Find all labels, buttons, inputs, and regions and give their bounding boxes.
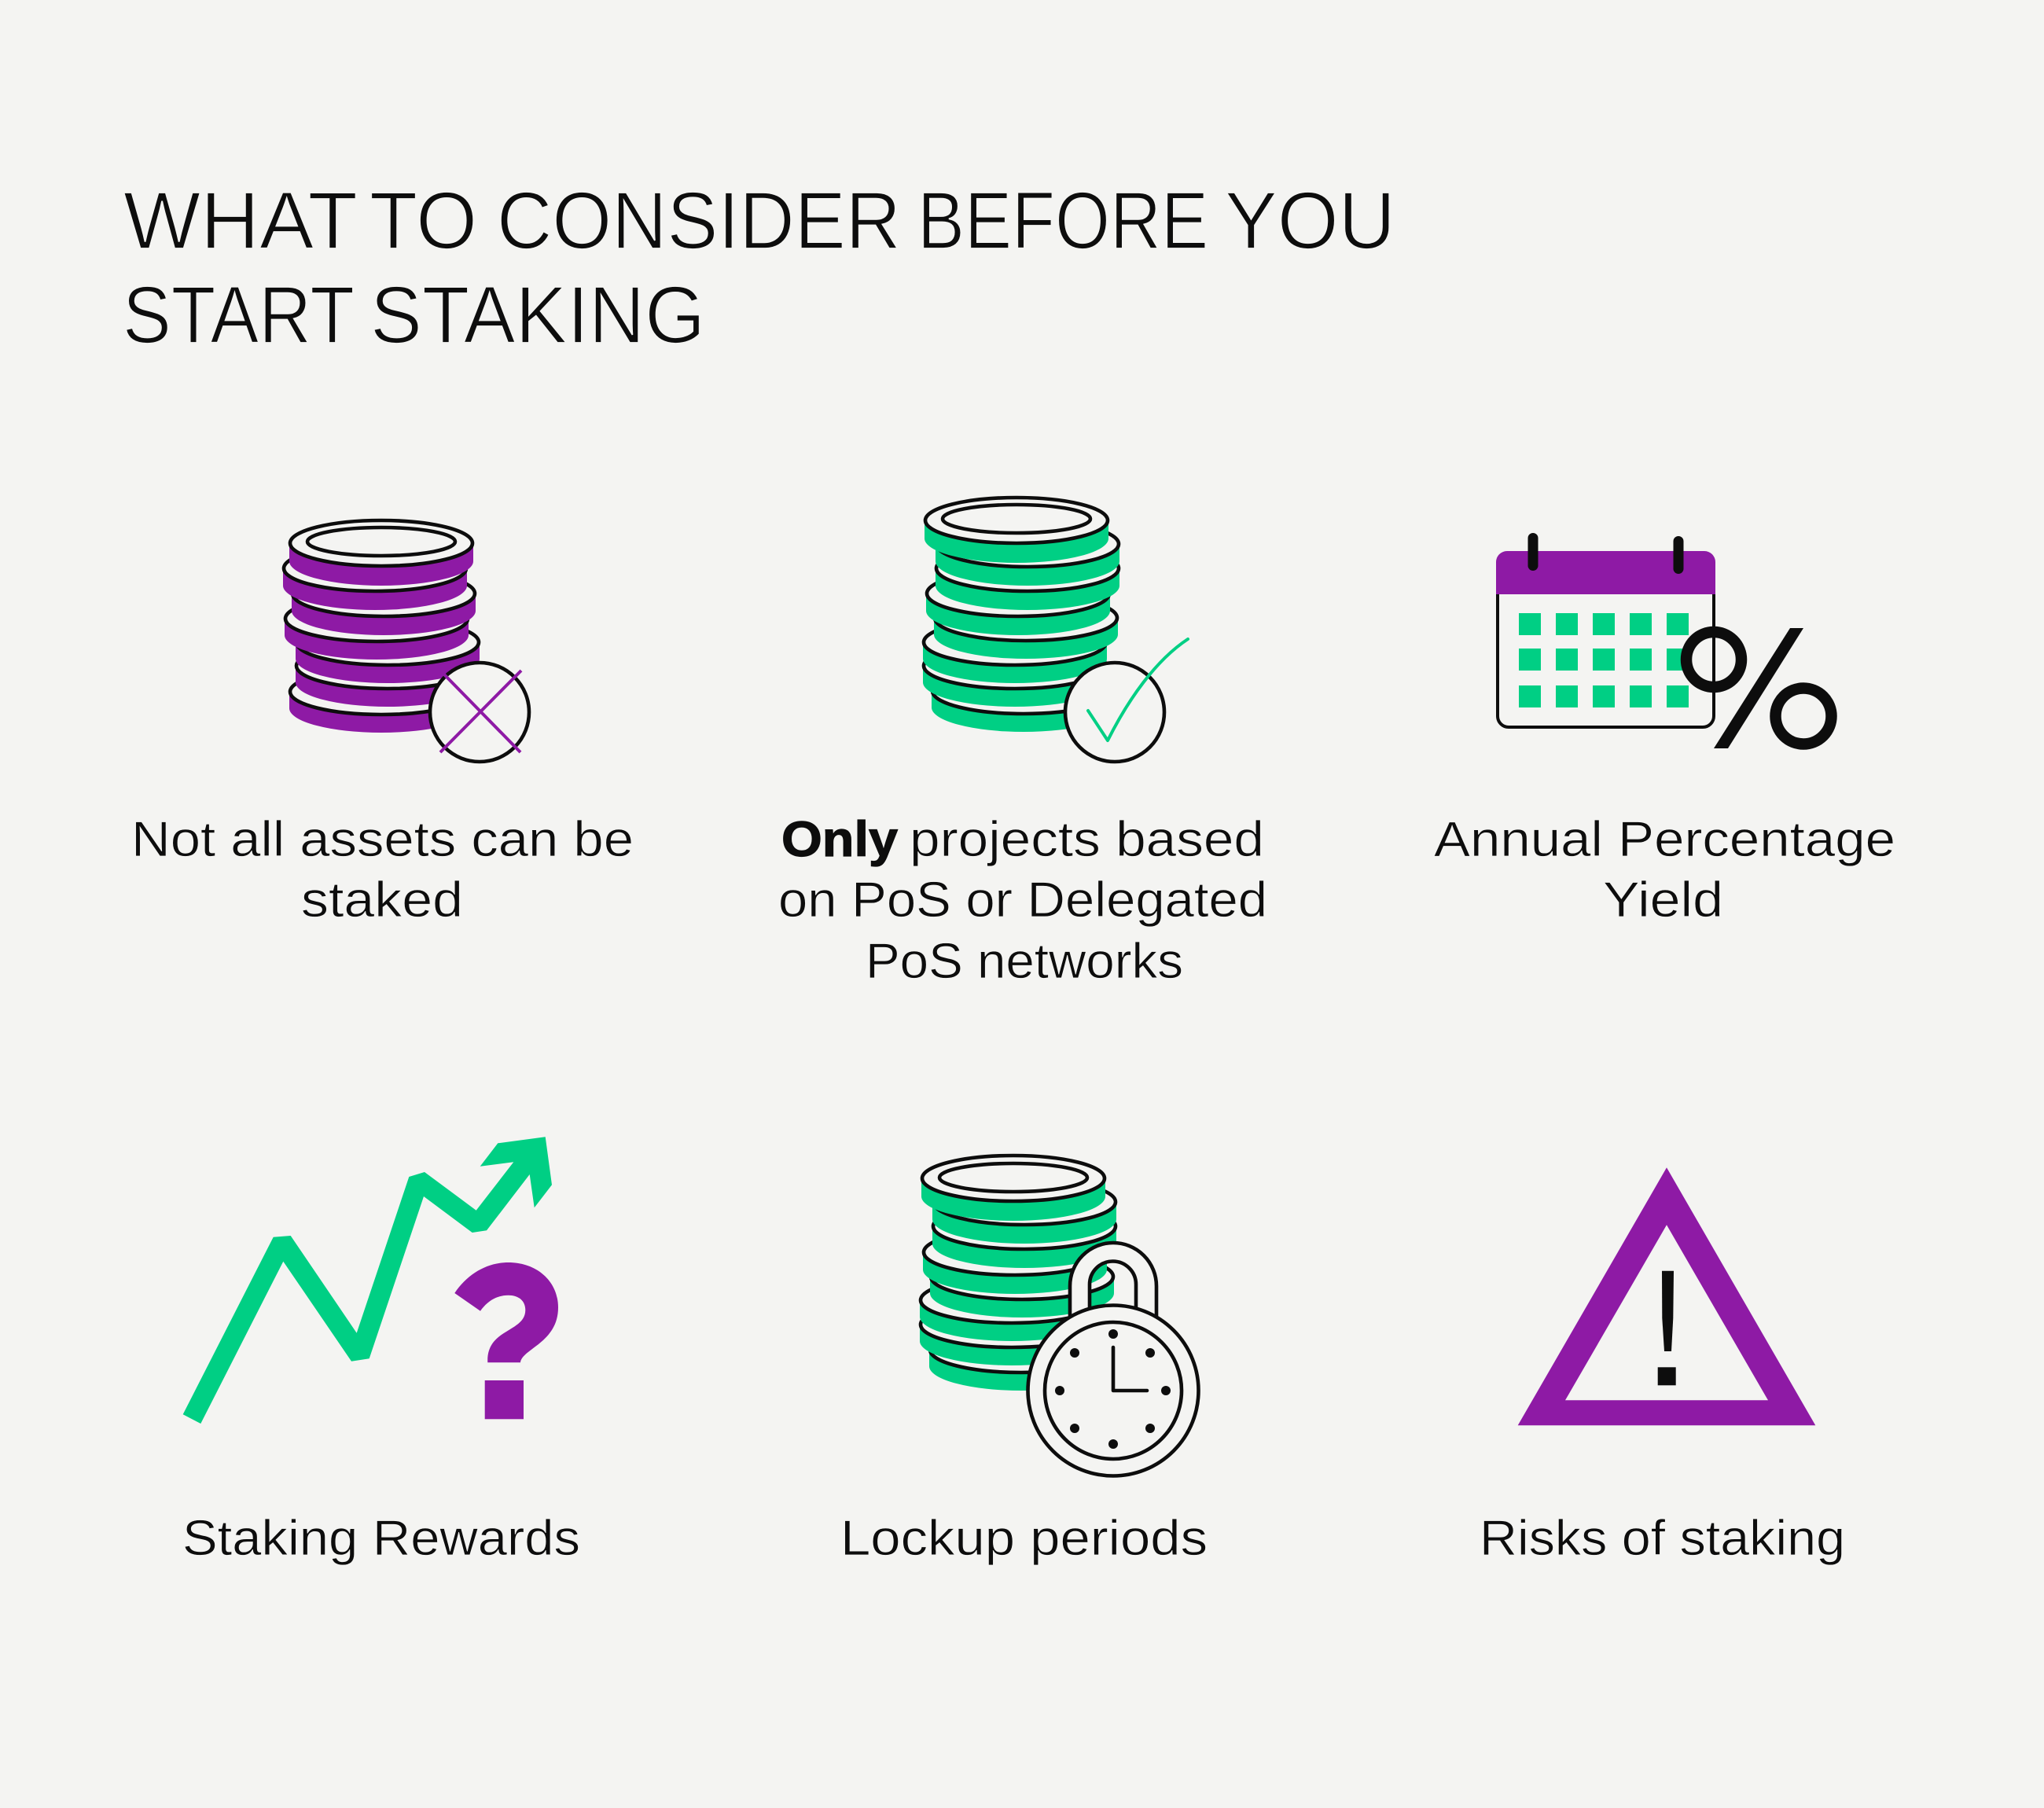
label: annual percentage yield: Annual Percentage <box>1434 812 1895 867</box>
panel: lockup periods <box>840 1156 1208 1566</box>
title: START <box>123 270 355 360</box>
label: annual percentage yield: Yield <box>1603 873 1723 928</box>
icon: green coin stack with check circle <box>923 498 1188 762</box>
icon: warning triangle <box>1518 1167 1815 1425</box>
label: not all assets: staked <box>301 873 463 928</box>
title: TO <box>369 175 477 266</box>
label: only projects based on PoS: Only <box>781 812 898 867</box>
icon: calendar with percent sign <box>1496 533 1832 748</box>
label: staking rewards: Staking Rewards <box>182 1511 580 1566</box>
label: only projects based on PoS <box>778 812 1267 989</box>
label: only projects based on PoS: on PoS or Delegated <box>778 873 1267 928</box>
title: BEFORE <box>917 175 1208 266</box>
title: WHAT <box>123 175 358 266</box>
label: lockup periods: Lockup periods <box>840 1511 1208 1566</box>
label: annual percentage yield <box>1434 812 1895 928</box>
label: not all assets: Not all assets can be <box>131 812 634 867</box>
icon: rising arrow chart with question mark <box>183 1137 558 1424</box>
panel: only PoS projects <box>778 498 1267 989</box>
title: CONSIDER <box>497 175 901 266</box>
label: not all assets <box>131 812 634 928</box>
panel: not all assets can be staked <box>131 520 634 928</box>
panel: annual percentage yield <box>1434 533 1895 928</box>
label: risks of staking: Risks of staking <box>1480 1511 1845 1566</box>
title: YOU <box>1225 175 1395 266</box>
panel: staking rewards <box>182 1137 580 1566</box>
title: STAKING <box>370 270 705 360</box>
panel: risks of staking <box>1480 1167 1845 1566</box>
label: only projects based on PoS: projects based <box>910 812 1264 867</box>
icon: purple coin stack with crossed circle <box>283 520 529 762</box>
label: only projects based on PoS: PoS networks <box>866 934 1183 989</box>
icon: green coin stack with clock padlock <box>920 1156 1198 1476</box>
title <box>123 175 1395 360</box>
